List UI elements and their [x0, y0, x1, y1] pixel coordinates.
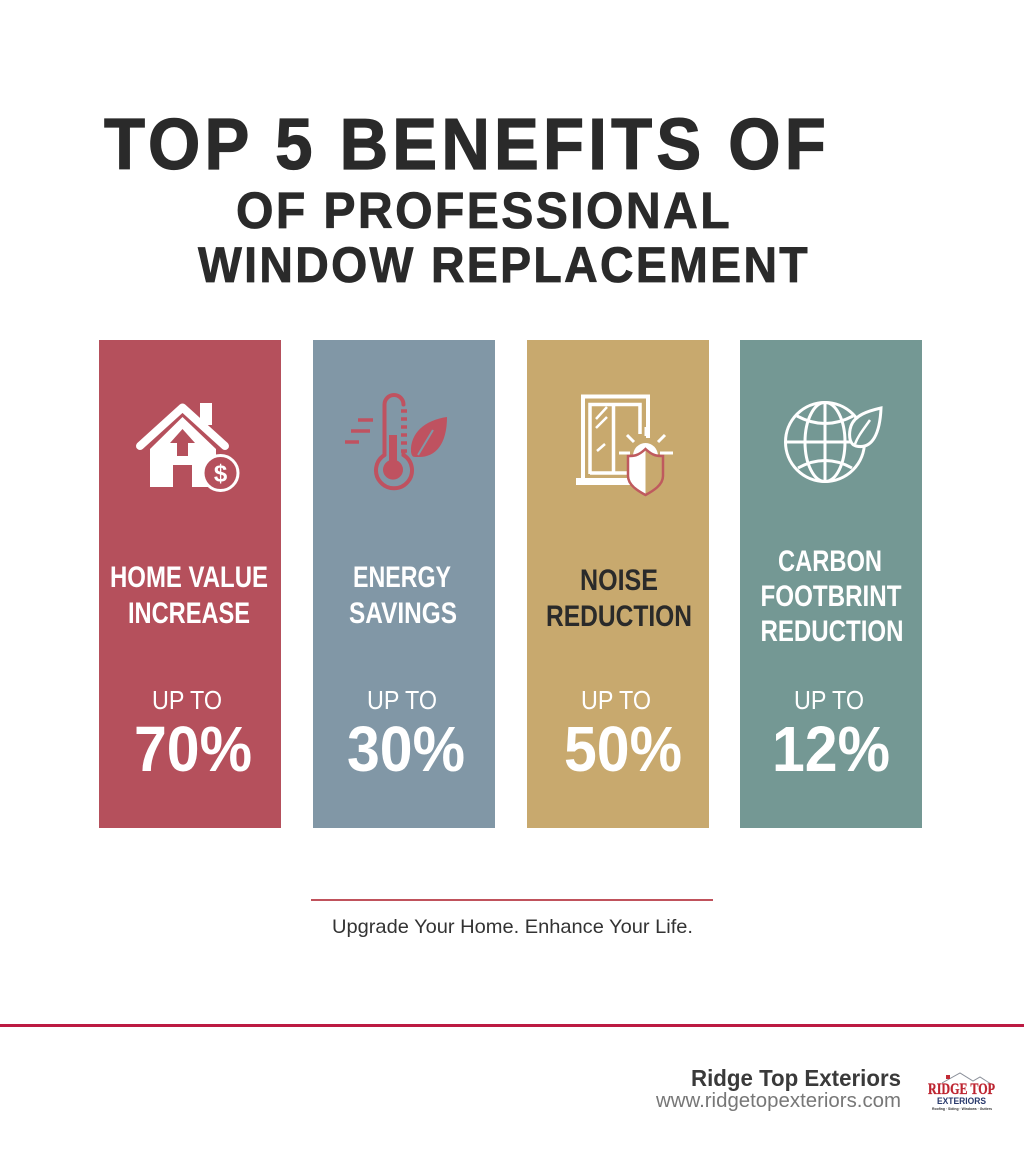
label: noise reduction [546, 564, 692, 633]
panel: energy savings [313, 340, 495, 828]
logo: Ridge Top Exteriors: RIDGE TOP [928, 1081, 995, 1098]
company website: www.ridgetopexteriors.com [655, 1090, 901, 1112]
stat: up to 12%: 12% [772, 713, 890, 785]
label: carbon footbrint reduction: FOOTBRINT [760, 580, 902, 613]
label: home value increase [110, 561, 268, 630]
label: carbon footbrint reduction [760, 545, 904, 648]
label: carbon footbrint reduction: REDUCTION [760, 615, 904, 648]
stat: up to 30% [347, 685, 465, 785]
panel: home value increase [99, 340, 281, 828]
label: carbon footbrint reduction: CARBON [778, 545, 882, 578]
tagline: Upgrade Your Home. Enhance Your Life. [332, 916, 693, 938]
icon: thermometer with leaf [345, 395, 447, 488]
panel: carbon footprint reduction [740, 340, 922, 828]
label: noise reduction: NOISE [580, 564, 658, 597]
label: energy savings [349, 561, 457, 630]
title [104, 105, 830, 293]
label: noise reduction: REDUCTION [546, 600, 692, 633]
stat: up to 70% [134, 685, 252, 785]
title: TOP 5 BENEFITS OF [104, 105, 830, 185]
label: energy savings: SAVINGS [349, 597, 457, 630]
stat: up to 70%: 70% [134, 713, 252, 785]
stat: up to 50% [564, 685, 682, 785]
stat: up to 12%: UP TO [794, 685, 864, 715]
icon: house with dollar coin [140, 403, 238, 490]
footer divider [0, 1024, 1024, 1027]
logo: Ridge Top Exteriors: EXTERIORS [937, 1096, 986, 1106]
stat: up to 12% [772, 685, 890, 785]
label: home value increase: HOME VALUE [110, 561, 268, 594]
panel: noise reduction [527, 340, 709, 828]
icon: house with dollar coin: $ [214, 460, 228, 488]
tagline rule [311, 899, 713, 901]
icon: globe with leaf [786, 402, 881, 482]
company name: Ridge Top Exteriors [691, 1065, 901, 1091]
stat: up to 50%: UP TO [581, 685, 651, 715]
stat: up to 30%: UP TO [367, 685, 437, 715]
label: energy savings: ENERGY [353, 561, 451, 594]
stat: up to 70%: UP TO [152, 685, 222, 715]
label: home value increase: INCREASE [128, 597, 250, 630]
logo: Ridge Top Exteriors [928, 1073, 995, 1111]
icon: window with shield [576, 396, 673, 495]
stat: up to 30%: 30% [347, 713, 465, 785]
title: OF PROFESSIONAL [236, 182, 732, 239]
logo: Ridge Top Exteriors: Roofing · Siding · Windows · Gutters [932, 1106, 993, 1111]
stat: up to 50%: 50% [564, 713, 682, 785]
title: WINDOW REPLACEMENT [198, 237, 810, 293]
